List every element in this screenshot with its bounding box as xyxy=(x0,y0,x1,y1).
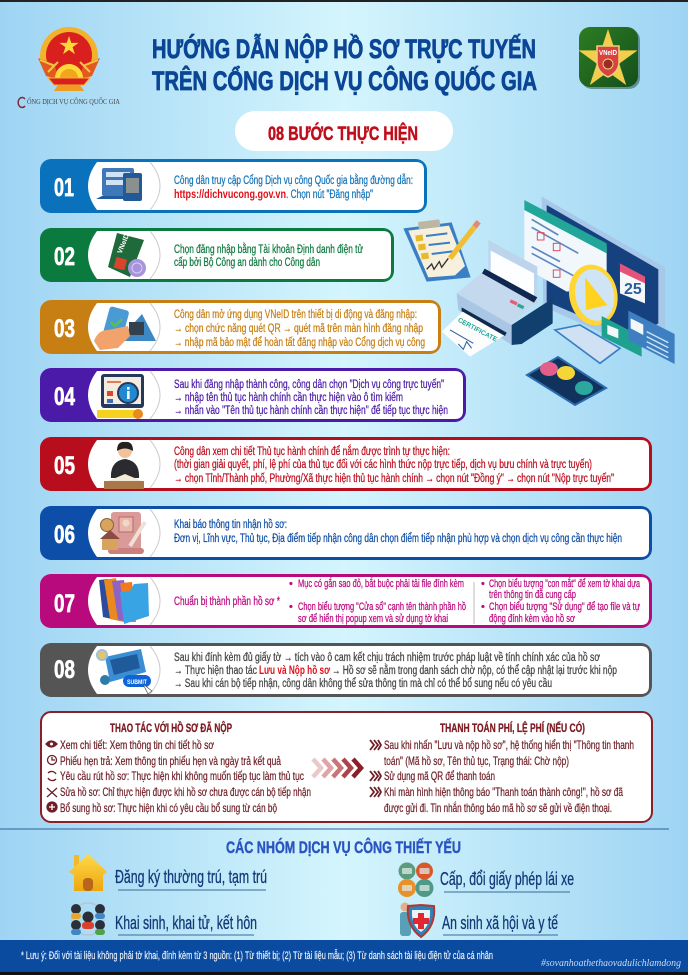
title: HƯỚNG DẪN NỘP HỒ SƠ TRỰC TUYẾN xyxy=(152,33,536,64)
step 04: → nhấn vào "Tên thủ tục hành chính cần thực hiện" để tiếp tục thực hiện xyxy=(174,405,448,417)
icon: hand scanning QR xyxy=(94,306,156,350)
service: social security and health: An sinh xã hội và y tế xyxy=(442,913,558,933)
icon: doctor and shield xyxy=(400,902,434,937)
services heading: CÁC NHÓM DỊCH VỤ CÔNG THIẾT YẾU xyxy=(226,838,461,857)
icon: VNeID badge xyxy=(579,27,640,89)
step 07: trên thông tin đã cung cấp xyxy=(489,589,576,601)
step 07: Chọn biểu tượng "Cửa sổ" cạnh tên thành phần hồ xyxy=(298,601,466,613)
step 08: → Thực hiện thao tác xyxy=(174,665,257,677)
icons: fee bullets xyxy=(370,740,381,797)
step 07: sơ để hiển thị popup xem và sử dụng tờ khai xyxy=(298,613,448,625)
printer xyxy=(457,240,553,345)
step 05 xyxy=(40,437,652,491)
panel: actions and fees xyxy=(41,712,652,822)
step 05: Công dân xem chi tiết Thủ tục hành chính để nắm được trình tự thực hiện: xyxy=(174,445,450,458)
chat cards xyxy=(602,311,675,364)
arrows: chevrons xyxy=(313,759,361,777)
step 03: 03 xyxy=(54,315,75,343)
certificate: CERTIFICATE xyxy=(456,317,499,344)
step 05: 05 xyxy=(54,452,75,480)
actions list: Sửa hồ sơ: Chỉ thực hiện được khi hồ sơ chưa được cán bộ tiếp nhận xyxy=(60,785,311,799)
actions list: Phiếu hẹn trả: Xem thông tin phiếu hẹn và ngày trả kết quả xyxy=(60,754,281,768)
step 03 xyxy=(40,300,441,354)
service: residence xyxy=(69,854,267,891)
step 03: → nhập mã bảo mật để hoàn tất đăng nhập vào Cổng dịch vụ công xyxy=(174,337,425,349)
quiz panel xyxy=(524,200,607,292)
step 03: → chọn chức năng quét QR → quét mã trên màn hình đăng nhập xyxy=(174,323,423,335)
step 06: 06 xyxy=(54,521,75,549)
icon: national emblem xyxy=(38,27,100,91)
monitor xyxy=(542,197,665,363)
service: civil status: Khai sinh, khai tử, kết hôn xyxy=(115,913,257,933)
step 07: động đính kèm vào hồ sơ xyxy=(489,613,575,625)
step 01: https://dichvucong.gov.vn xyxy=(174,187,286,201)
step 07: Chuẩn bị thành phần hồ sơ * xyxy=(174,596,280,608)
icon: laptop with QR xyxy=(96,168,142,201)
actions list: Yêu cầu rút hồ sơ: Thực hiện khi không muốn tiếp tục làm thủ tục xyxy=(60,769,304,783)
step 02: Chọn đăng nhập bằng Tài khoản Định danh điện tử xyxy=(174,243,363,256)
step 06: Khai báo thông tin nhận hồ sơ: xyxy=(174,519,287,531)
step 04: Sau khi đăng nhập thành công, công dân chọn "Dịch vụ công trực tuyến" xyxy=(174,379,444,391)
step 07: • xyxy=(289,578,293,590)
fees list: toán" (Mã hồ sơ, Tên thủ tục, Trạng thái: Chờ nộp) xyxy=(384,754,569,768)
fees list xyxy=(384,738,634,815)
step 03: Công dân mở ứng dụng VNeID trên thiết bị di động và đăng nhập: xyxy=(174,309,417,321)
step 07: • xyxy=(289,601,293,613)
service: civil status xyxy=(71,903,257,935)
step 07: • xyxy=(481,578,485,590)
step 07: 07 xyxy=(54,590,75,618)
icon: people network xyxy=(71,903,105,935)
service: driving licence: Cấp, đổi giấy phép lái xe xyxy=(440,869,574,889)
service: residence: Đăng ký thường trú, tạm trú xyxy=(115,867,267,887)
icon: four coloured badges xyxy=(398,862,434,897)
icon: pink document scroll xyxy=(100,512,145,554)
step 01: . Chọn nút "Đăng nhập" xyxy=(286,189,373,201)
divider xyxy=(0,828,669,830)
illustration: phone with reaction buttons xyxy=(527,357,606,405)
step 02: 02 xyxy=(54,243,75,271)
icon: clipboard illustration xyxy=(403,219,479,282)
step 07: Mục có gắn sao đỏ, bắt buộc phải tải file đính kèm xyxy=(298,577,464,590)
title: TRÊN CỔNG DỊCH VỤ CÔNG QUỐC GIA xyxy=(152,64,537,96)
play button xyxy=(563,260,623,330)
portal wordmark xyxy=(18,96,120,108)
actions heading: THAO TÁC VỚI HỒ SƠ ĐÃ NỘP xyxy=(110,720,232,735)
top edge xyxy=(0,0,688,2)
step 08: 08 xyxy=(54,656,75,684)
icons: actions xyxy=(46,741,57,812)
step 02: cấp bởi Bộ Công an dành cho Công dân xyxy=(174,257,320,269)
step 02 xyxy=(40,228,394,282)
icon: submit screen xyxy=(97,649,152,694)
step 01 xyxy=(40,159,427,213)
title xyxy=(152,33,537,96)
fees heading: THANH TOÁN PHÍ, LỆ PHÍ (NẾU CÓ) xyxy=(440,720,585,735)
subtitle pill xyxy=(235,111,453,151)
calendar: 25 xyxy=(624,281,642,298)
hashtag: #sovanhoathethaovadulichlamdong xyxy=(541,958,681,969)
subtitle pill: 08 BƯỚC THỰC HIỆN xyxy=(268,123,418,145)
step 04: 04 xyxy=(54,383,75,411)
step 08: Lưu và Nộp hồ sơ xyxy=(259,663,330,677)
icon: VNeID badge: VNeID xyxy=(599,50,617,57)
certificate xyxy=(442,312,504,357)
step 07 xyxy=(40,574,652,628)
step 01: Công dân truy cập Cổng Dịch vụ công Quốc gia bằng đường dẫn: xyxy=(174,174,413,187)
icon: submit screen: SUBMIT xyxy=(127,679,147,686)
icon: house xyxy=(69,854,107,891)
actions list: Xem chi tiết: Xem thông tin chi tiết hồ sơ xyxy=(60,738,214,752)
step 01: 01 xyxy=(54,174,74,202)
step 08 xyxy=(40,643,652,697)
service: social security and health xyxy=(400,902,558,937)
icon: info monitor xyxy=(97,374,144,419)
icon: folders xyxy=(99,578,149,624)
step 08: → Sau khi cán bộ tiếp nhận, công dân không thể sửa thông tin mà chỉ có thể bổ sung nếu có yêu cầu xyxy=(174,678,552,690)
icon: VNeID phone with fingerprint: VNeID xyxy=(117,233,131,255)
fees list: Sử dụng mã QR để thanh toán xyxy=(384,769,495,783)
step 07: • xyxy=(481,601,485,613)
portal wordmark: ỔNG DỊCH VỤ CÔNG QUỐC GIA xyxy=(27,96,120,106)
icon: woman reading xyxy=(104,442,144,489)
footer bar xyxy=(0,940,688,975)
illustration: computer, printer and certificate xyxy=(442,197,675,364)
icon: VNeID phone with fingerprint xyxy=(108,233,146,277)
step 04: → nhập tên thủ tục hành chính cần thực hiện vào ô tìm kiếm xyxy=(174,392,403,404)
step 06 xyxy=(40,506,652,560)
calendar xyxy=(620,263,645,303)
step 04 xyxy=(40,368,466,422)
actions list xyxy=(60,738,311,815)
actions list: Bổ sung hồ sơ: Thực hiện khi có yêu cầu bổ sung từ cán bộ xyxy=(60,801,277,815)
service: driving licence xyxy=(398,862,574,897)
